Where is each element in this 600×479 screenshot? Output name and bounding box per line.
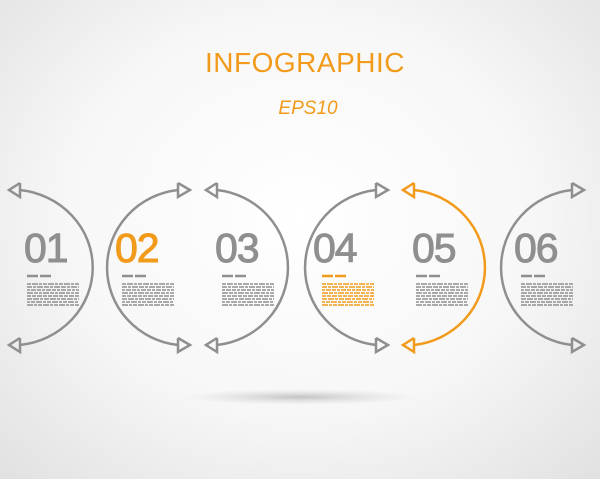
step 1 xyxy=(9,183,93,352)
numbers: 01 xyxy=(24,225,68,271)
numbers: 06 xyxy=(514,225,558,271)
step 4 xyxy=(305,183,388,352)
title: INFOGRAPHIC xyxy=(205,47,405,78)
numbers xyxy=(24,225,558,271)
text blocks xyxy=(27,276,573,305)
numbers: 05 xyxy=(412,225,456,271)
numbers: 04 xyxy=(313,225,357,271)
step 2 xyxy=(107,183,190,352)
step 3 xyxy=(206,183,288,352)
step 6 xyxy=(501,183,584,352)
subtitle: EPS10 xyxy=(278,98,338,119)
shadow xyxy=(180,389,420,405)
numbers: 03 xyxy=(215,225,259,271)
numbers: 02 xyxy=(115,225,159,271)
step 5 xyxy=(403,183,485,352)
